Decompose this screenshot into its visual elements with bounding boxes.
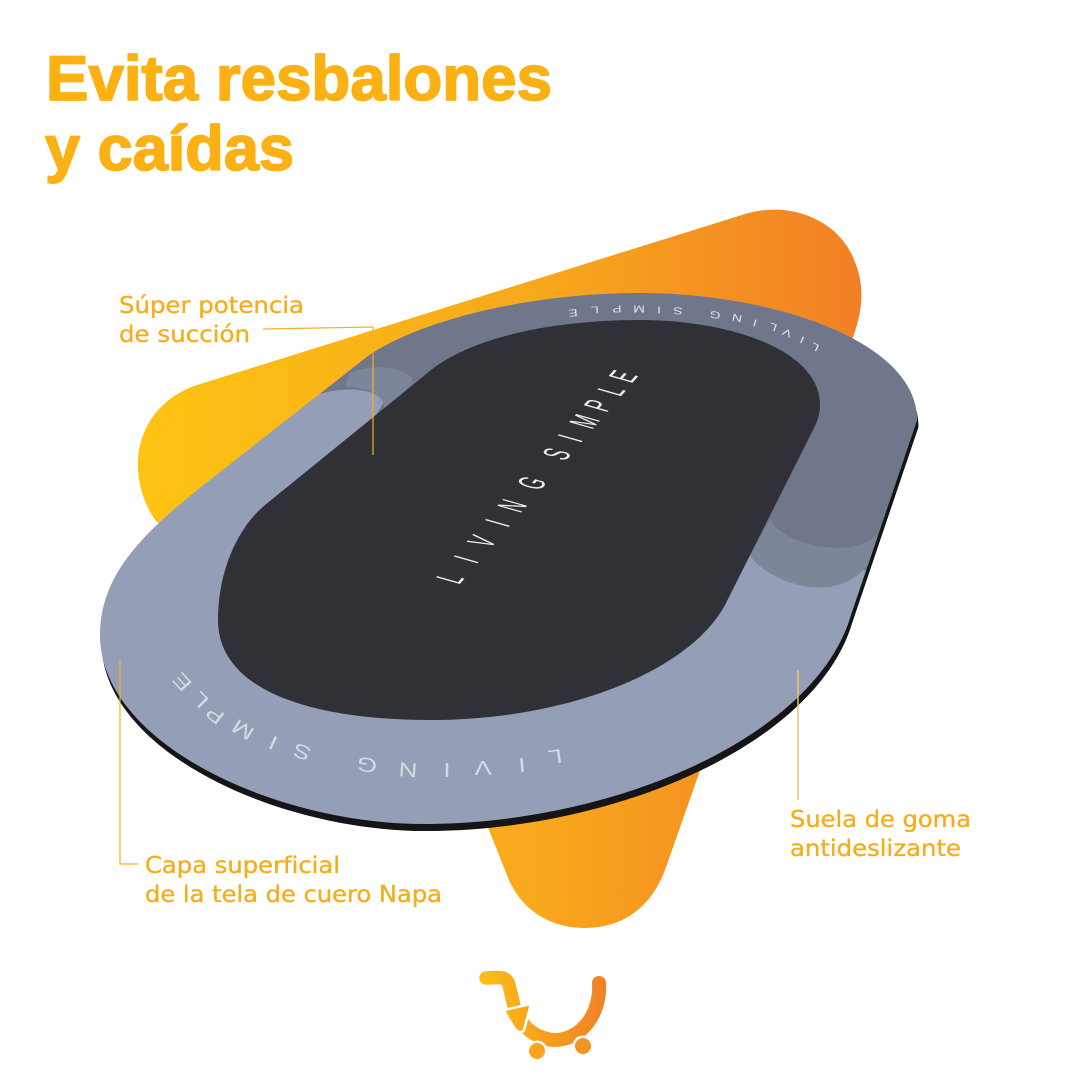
orange rounded triangle backdrop: [138, 210, 861, 928]
dark inner panel: [218, 320, 820, 720]
right fold step: [750, 520, 878, 587]
centre brand text: LIVING SIMPLE: [428, 367, 646, 587]
upper edge brand text: I: [657, 304, 661, 316]
mat surface: [100, 293, 917, 824]
lower edge brand text: I: [443, 759, 451, 781]
upper edge brand text: L: [809, 340, 821, 354]
lower edge brand text: M: [228, 715, 258, 745]
upper edge brand text: I: [751, 317, 759, 329]
lower edge brand text: I: [265, 731, 281, 755]
upper darker fold: [319, 293, 917, 588]
title: Evita resbalones: [46, 44, 552, 114]
callout: surface layer: de la tela de cuero Napa: [145, 882, 442, 908]
upper edge brand text: V: [780, 325, 794, 340]
lower edge brand text: G: [355, 752, 379, 778]
mat rubber sole edge: [102, 300, 918, 831]
title: y caídas: [45, 114, 294, 184]
lower edge brand text: S: [290, 738, 314, 765]
lower edge brand text: I: [517, 753, 527, 776]
upper edge brand text: S: [673, 305, 683, 317]
callout: rubber sole: Suela de goma: [790, 807, 971, 833]
callout: rubber sole: antideslizante: [790, 836, 961, 862]
lower edge brand text: V: [473, 756, 492, 779]
upper edge brand text: L: [767, 320, 779, 334]
title: [45, 44, 552, 184]
upper edge brand text: I: [798, 334, 806, 346]
upper edge brand text: P: [612, 303, 622, 315]
lower edge brand text: P: [201, 701, 229, 729]
upper edge brand text: N: [731, 311, 743, 325]
upper edge brand text: M: [633, 303, 645, 315]
lower edge brand text: L: [187, 687, 213, 713]
lower edge brand text: E: [168, 668, 196, 696]
lower edge brand text: L: [546, 745, 564, 769]
callout: suction: [119, 293, 373, 455]
icon: shopping cart logo: [486, 978, 599, 1062]
infographic canvas: [44, 53, 970, 1059]
lower edge brand text: N: [398, 758, 418, 782]
lower edge brand text: [168, 668, 564, 782]
callout: rubber sole: [790, 670, 971, 862]
callout: surface layer: Capa superficial: [145, 853, 340, 879]
callout: suction: de succión: [119, 322, 250, 348]
bath mat: [100, 293, 918, 831]
callout: suction: Súper potencia: [119, 293, 304, 319]
upper edge brand text: L: [590, 304, 599, 316]
upper edge brand text: [568, 303, 821, 354]
left fold step: [345, 368, 413, 408]
callout: surface layer: [120, 660, 442, 908]
upper edge brand text: G: [709, 308, 721, 321]
upper edge brand text: E: [568, 307, 578, 319]
